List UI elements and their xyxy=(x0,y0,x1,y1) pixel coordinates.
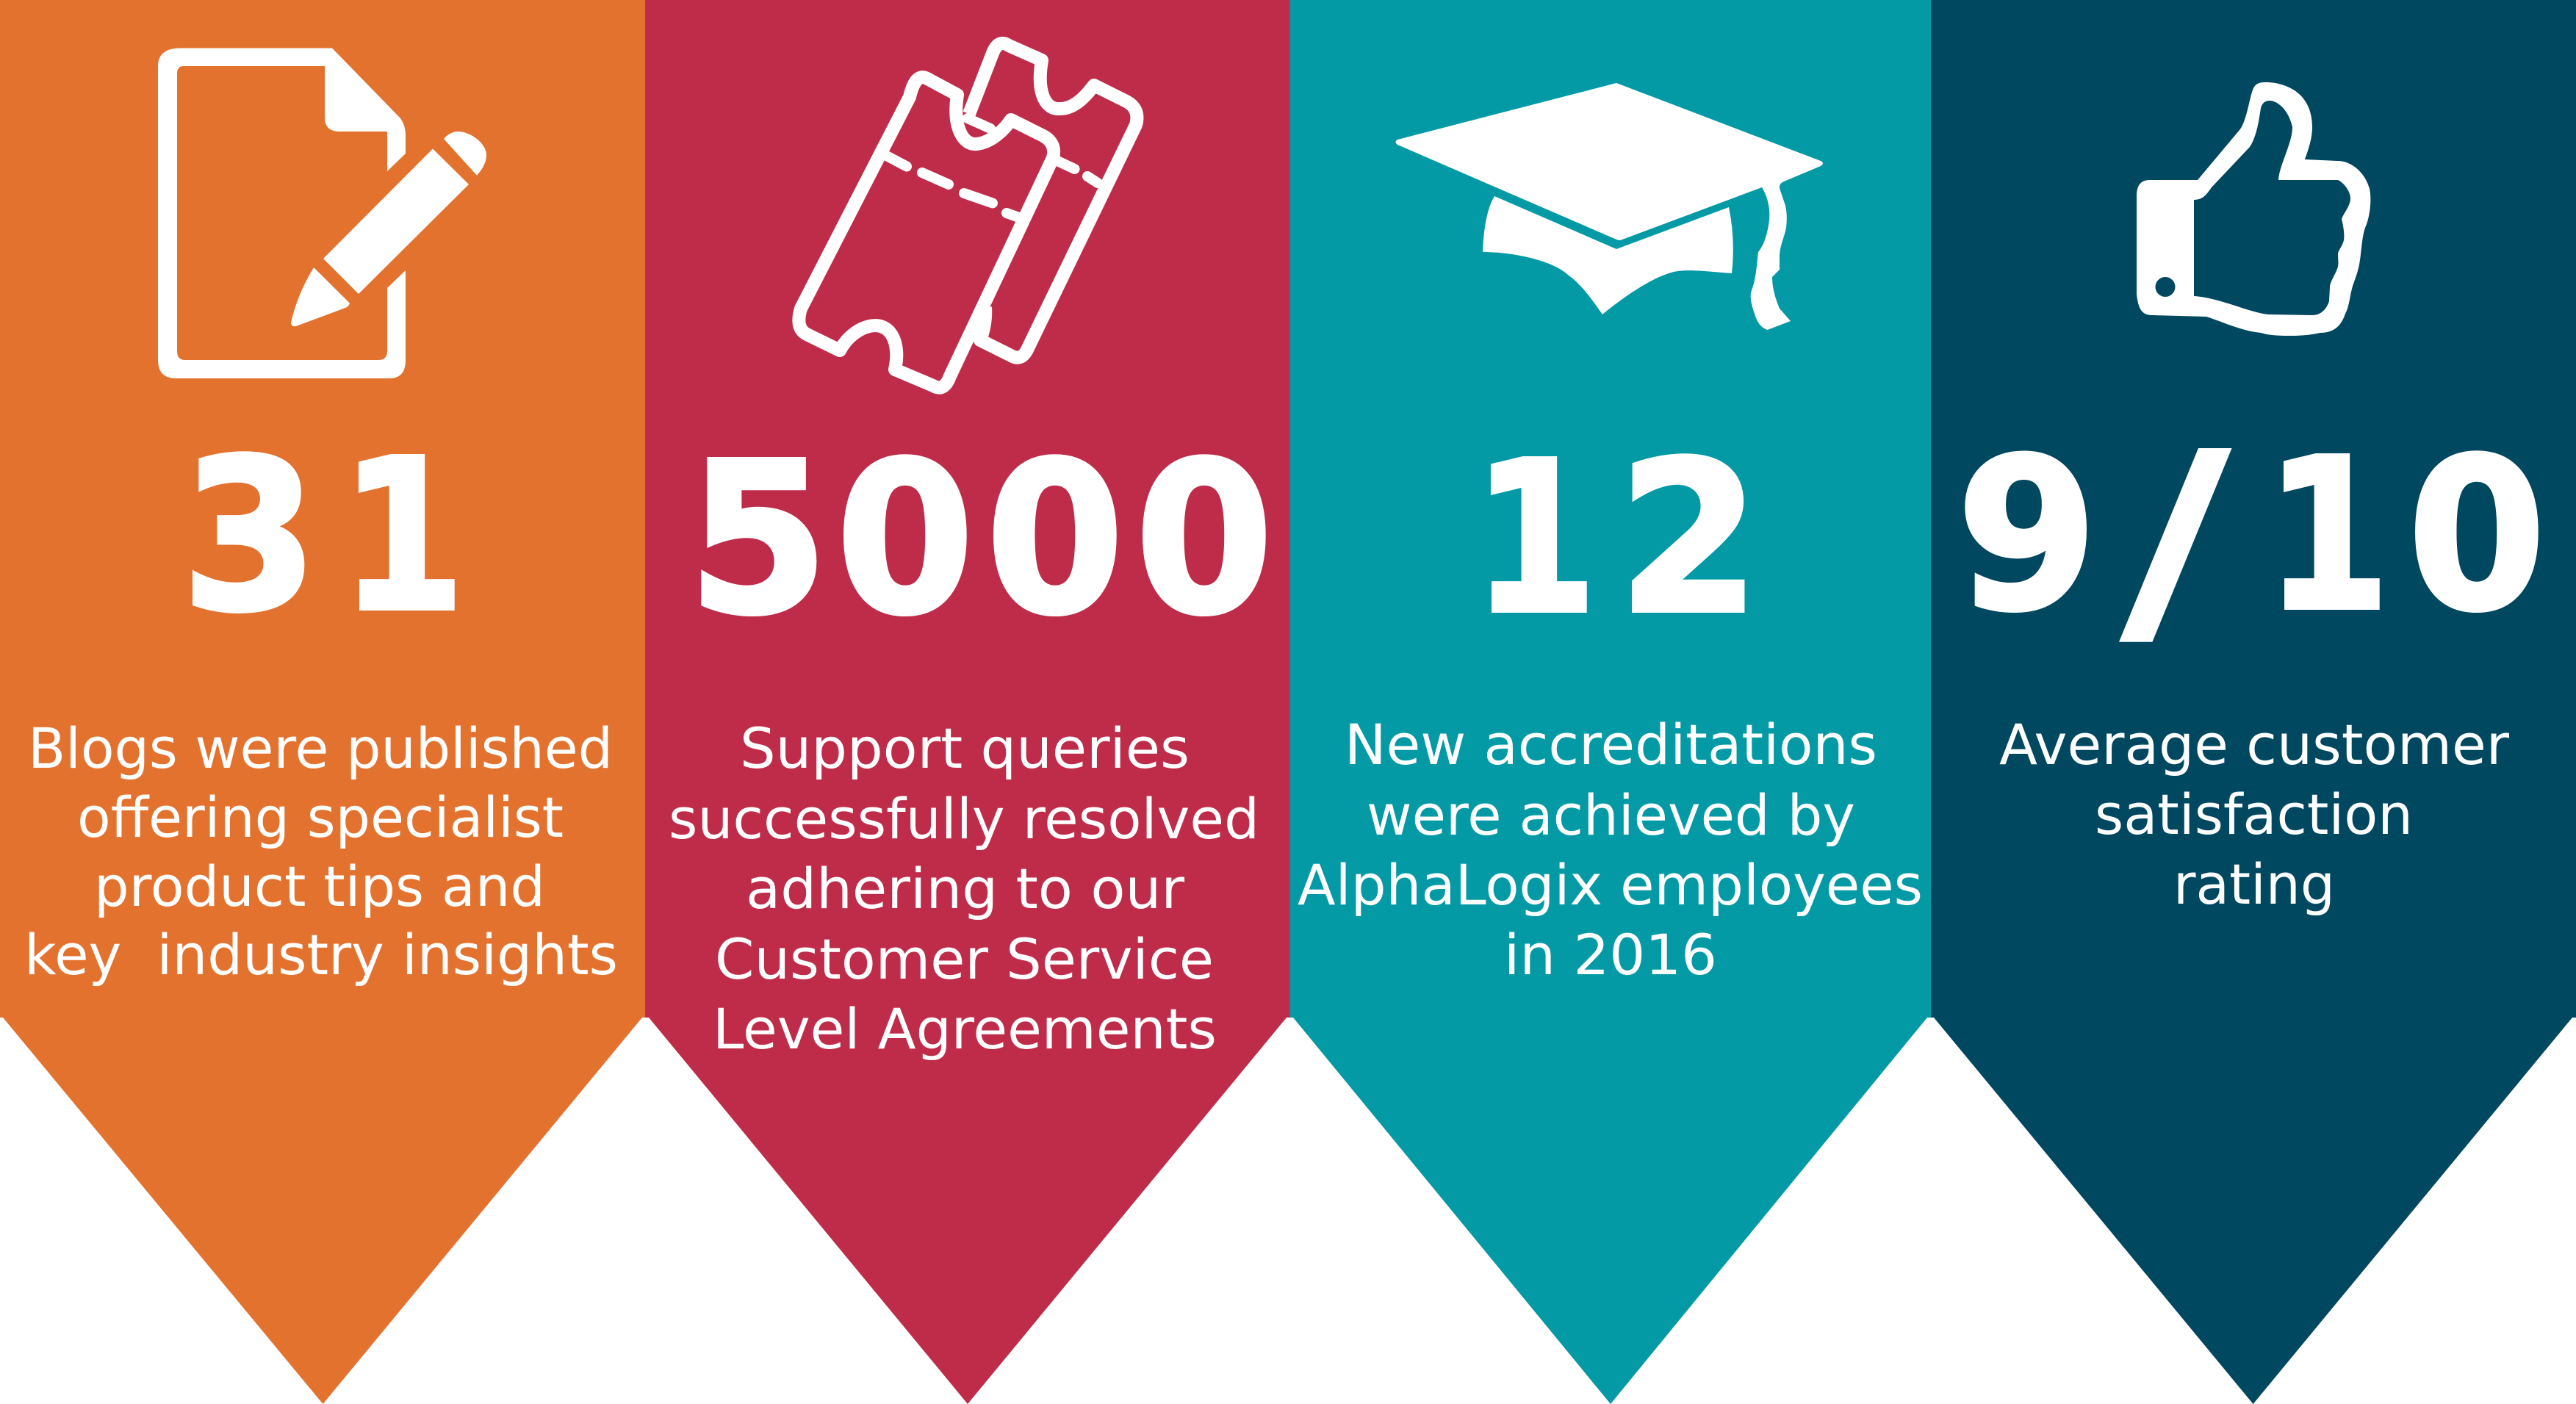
number: 12: 2 xyxy=(1618,417,1760,660)
text: support description: adhering to our xyxy=(746,856,1185,921)
text: support description: successfully resolved xyxy=(669,786,1259,852)
text: blogs description xyxy=(24,716,618,987)
number: 5000: 0 xyxy=(986,419,1124,661)
number: 5000: 0 xyxy=(1135,419,1273,661)
number: 12 xyxy=(1472,417,1760,660)
panel: customer satisfaction xyxy=(1931,0,2576,1404)
text: blogs description: key industry insights xyxy=(24,922,618,987)
text: satisfaction description xyxy=(1999,712,2510,917)
number: 31: 1 xyxy=(340,415,465,658)
number: 9/10 xyxy=(1957,402,2546,676)
text: accreditations description xyxy=(1298,712,1923,987)
text: accreditations description: were achieved by xyxy=(1367,782,1855,848)
text: blogs description: product tips and xyxy=(94,854,545,919)
number: 5000: 0 xyxy=(836,419,974,661)
text: support description: Support queries xyxy=(740,716,1190,781)
text: support description xyxy=(669,716,1259,1062)
text: satisfaction description: rating xyxy=(2173,852,2335,917)
icon: thumbs up xyxy=(2137,82,2370,336)
number: 9/10: / xyxy=(2119,402,2235,676)
icon: document and pencil xyxy=(158,48,486,378)
text: accreditations description: New accreditations xyxy=(1345,712,1877,777)
number: 9/10: 0 xyxy=(2408,415,2546,658)
text: accreditations description: in 2016 xyxy=(1504,922,1717,987)
panel: accreditations xyxy=(1290,0,1931,1404)
text: blogs description: Blogs were published xyxy=(28,716,613,781)
panel: blogs xyxy=(0,0,645,1404)
number: 5000 xyxy=(688,417,1273,661)
text: satisfaction description: Average customer xyxy=(1999,712,2510,777)
number: 9/10: 1 xyxy=(2265,414,2390,658)
text: support description: Level Agreements xyxy=(713,996,1217,1062)
number: 31: 3 xyxy=(181,414,318,658)
icon: two tickets xyxy=(799,43,1137,388)
panel: support queries xyxy=(645,0,1290,1404)
text: accreditations description: AlphaLogix employees xyxy=(1298,852,1923,918)
icon: graduation cap xyxy=(1396,83,1823,330)
number: 12: 1 xyxy=(1472,417,1597,660)
number: 9/10: 9 xyxy=(1957,414,2098,657)
text: support description: Customer Service xyxy=(715,926,1214,992)
text: blogs description: offering specialist xyxy=(77,785,564,850)
text: satisfaction description: satisfaction xyxy=(2095,782,2413,847)
number: 5000: 5 xyxy=(688,417,829,660)
number: 31 xyxy=(181,414,465,658)
